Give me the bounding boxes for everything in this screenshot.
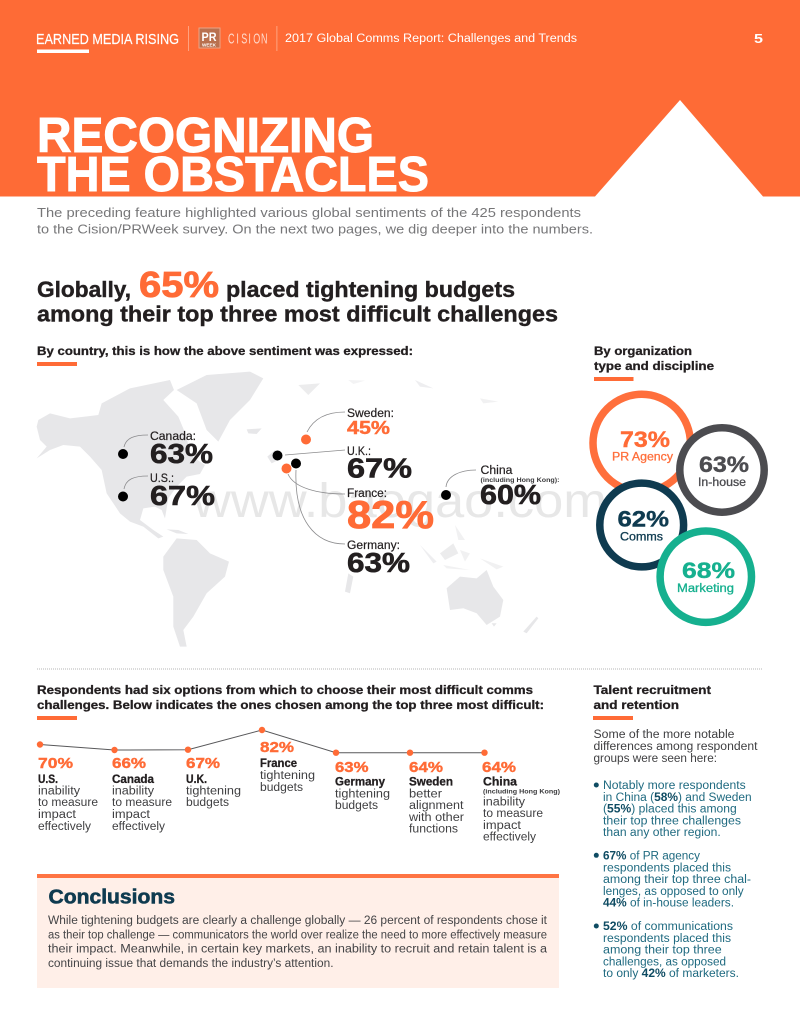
heading: talent recruitment: [593, 683, 711, 720]
bullet: PR agency: 44% of in-house leaders.: [603, 898, 734, 910]
map label: Germany: Germany:: [347, 540, 400, 552]
circle: In-house: [680, 428, 764, 512]
main headline: [37, 264, 558, 326]
map label: Canada: 63%: [150, 438, 213, 469]
conclusions body: continuing issue that demands the industry’s attention.: [48, 958, 334, 970]
circle: Comms: [600, 483, 684, 567]
column: Sweden: Sweden: [409, 774, 453, 788]
brand: Earned Media Rising: EARNED MEDIA RISING: [36, 31, 179, 48]
talent intro text: groups were seen here:: [594, 753, 717, 765]
column: Canada: to measure: [112, 797, 172, 809]
column: Germany: tightening: [335, 788, 390, 800]
circle: Comms: 62%: [618, 507, 669, 532]
map label: U.S.: U.S.:: [150, 473, 174, 485]
map label: China: 60%: [480, 479, 541, 510]
column: China: [482, 759, 560, 844]
circle: In-house: 63%: [699, 452, 749, 477]
heading: by organization: [594, 344, 714, 381]
map label: Sweden: Sweden:: [347, 408, 394, 420]
leader lines: [124, 412, 476, 544]
column: Canada: inability: [112, 786, 154, 798]
map label: China: China: [480, 465, 513, 477]
column: China: 64%: [482, 759, 516, 776]
column: Sweden: alignment: [409, 800, 464, 812]
map label: Canada: [118, 431, 213, 469]
heading: by organization: type and discipline: [594, 359, 714, 373]
brand: Earned Media Rising: [36, 31, 179, 53]
map label: France: [282, 464, 434, 537]
column: U.S.: 70%: [38, 755, 73, 772]
bullet: communications: [594, 921, 739, 980]
map label: Canada: Canada:: [150, 431, 196, 443]
bullet: communications: respondents placed this: [603, 933, 731, 945]
page number: 5: [754, 31, 763, 46]
column: France: France: [260, 756, 297, 770]
logo: PRWeek: PR: [202, 30, 217, 44]
logo: PRWeek: [199, 28, 220, 48]
main headline: among their top three most difficult challenges: [37, 302, 558, 326]
title: [37, 109, 429, 202]
heading: conclusions: Conclusions: [48, 887, 175, 909]
circle: Marketing: [660, 531, 752, 622]
column: U.S.: to measure: [38, 797, 98, 809]
heading: six options: Respondents had six options from which to choose their most difficult comms: [37, 683, 533, 697]
column: U.S.: impact: [38, 809, 77, 821]
bullet: communications: challenges, as opposed: [603, 956, 726, 968]
intro text: to the Cision/PRWeek survey. On the next two pages, we dig deeper into the numbers.: [37, 222, 593, 236]
column: U.K.: tightening: [186, 786, 241, 798]
column: China: (including Hong Kong): [483, 789, 560, 796]
column: China: inability: [483, 796, 525, 808]
map label: France: 82%: [347, 494, 434, 537]
circle: PR Agency: [593, 394, 690, 492]
map label: U.S.: [118, 473, 215, 511]
circle: Marketing: Marketing: [677, 583, 734, 595]
conclusions body: While tightening budgets are clearly a challenge globally — 26 percent of respondents chose it: [48, 915, 548, 927]
column: China: China: [483, 774, 517, 788]
column: U.K.: 67%: [186, 755, 220, 772]
intro text: The preceding feature highlighted various global sentiments of the 425 respondents: [37, 205, 582, 220]
bullet: PR agency: 67% of PR agency: [603, 850, 700, 862]
column: Sweden: 64%: [409, 759, 443, 776]
logo: PRWeek: WEEK: [202, 42, 217, 48]
column: Germany: 63%: [335, 759, 368, 776]
panel: conclusions: [37, 874, 559, 988]
bullet: China and Sweden: [594, 780, 752, 839]
bullet: China and Sweden: their top three challenges: [603, 816, 741, 828]
bullet: PR agency: lenges, as opposed to only: [603, 886, 744, 898]
heading: by organization: By organization: [594, 344, 692, 358]
talent intro text: Some of the more notable: [594, 729, 734, 741]
bullet: PR agency: respondents placed this: [603, 862, 731, 874]
map label: China: (including Hong Kong):: [480, 477, 560, 484]
bullet: communications: 52% of communications: [603, 921, 733, 933]
title: RECOGNIZING: [37, 109, 374, 163]
column: Canada: 66%: [112, 755, 146, 772]
map label: France: France:: [347, 488, 387, 500]
world map: [37, 372, 538, 647]
map label: Sweden: [301, 408, 394, 444]
column: Canada: effectively: [112, 821, 165, 833]
circle: In-house: In-house: [698, 477, 746, 489]
column: France: [260, 739, 315, 794]
heading: by country: By country, this is how the above sentiment was expressed:: [37, 344, 413, 358]
header banner: [0, 0, 800, 202]
map label: U.K.: [272, 446, 412, 484]
column: U.S.: effectively: [38, 821, 91, 833]
map label: U.S.: 67%: [150, 480, 215, 511]
column: Sweden: with other: [408, 812, 464, 824]
heading: six options: challenges. Below indicates the ones chosen among the top three most difficult:: [37, 698, 544, 712]
heading: talent recruitment: Talent recruitment: [594, 683, 711, 697]
conclusions body: their impact. Meanwhile, in certain key markets, an inability to recruit and retain talent is a: [48, 944, 548, 956]
map label: U.K.: U.K.:: [347, 446, 371, 458]
conclusions body: as their top challenge — communicators the world over realize the need to more effectively measure: [48, 929, 547, 941]
map label: Germany: 63%: [347, 547, 410, 578]
column: U.S.: U.S.: [38, 772, 58, 786]
main headline: Globally,: [37, 277, 131, 302]
column: France: budgets: [260, 782, 303, 794]
bullet: PR agency: among their top three chal-: [603, 874, 751, 886]
column: France: tightening: [260, 770, 315, 782]
column: France: 82%: [260, 739, 294, 756]
report name: 2017 Global Comms Report: Challenges and Trends: [285, 33, 577, 45]
watermark: www.baogao.com: [192, 475, 607, 528]
bullet: China and Sweden: Notably more respondents: [603, 780, 746, 792]
column: Canada: impact: [112, 809, 151, 821]
circle: Comms: Comms: [620, 532, 663, 544]
column: China: to measure: [483, 808, 543, 820]
bullet: communications: to only 42% of marketers.: [603, 968, 739, 980]
heading: six options: [37, 683, 544, 720]
column: U.K.: budgets: [186, 797, 229, 809]
map label: U.K.: 67%: [347, 452, 412, 484]
column: China: effectively: [483, 832, 536, 844]
title: THE OBSTACLES: [37, 148, 429, 202]
bullet: China and Sweden: in China (58%) and Sweden: [603, 792, 752, 804]
map label: Germany: [291, 458, 410, 578]
talent intro text: [594, 729, 758, 765]
column: Canada: [112, 755, 172, 833]
bullet: China and Sweden: (55%) placed this among: [603, 804, 737, 816]
talent intro text: differences among respondent: [594, 741, 758, 753]
column: Sweden: [408, 759, 464, 836]
logo: Cision: CISION: [228, 30, 268, 47]
column: Canada: Canada: [112, 772, 154, 786]
map label: Sweden: 45%: [347, 418, 390, 438]
column: China: impact: [483, 820, 522, 832]
bullet: China and Sweden: than any other region.: [603, 827, 721, 839]
circle: Marketing: 68%: [682, 558, 735, 583]
column: U.S.: inability: [38, 786, 80, 798]
line chart: [37, 727, 488, 756]
bullet: communications: among their top three: [603, 945, 722, 957]
map label: China: [441, 465, 560, 510]
column: U.K.: [186, 755, 241, 809]
circle: PR Agency: 73%: [620, 427, 670, 452]
column: Sweden: better: [409, 788, 442, 800]
heading: talent recruitment: and retention: [594, 698, 679, 712]
column: Germany: [335, 759, 390, 812]
heading: by country: [37, 344, 413, 366]
column: U.K.: U.K.: [186, 772, 207, 786]
main headline: 65%: [139, 264, 219, 305]
column: Germany: budgets: [335, 800, 378, 812]
bullet: PR agency: [594, 850, 751, 910]
column: U.S.: [38, 755, 98, 833]
main headline: placed tightening budgets: [226, 277, 515, 302]
intro text: [37, 205, 593, 236]
conclusions body: [48, 915, 548, 970]
white triangle: [595, 100, 763, 196]
circle: PR Agency: PR Agency: [612, 452, 673, 464]
column: Germany: Germany: [335, 774, 385, 788]
column: Sweden: functions: [409, 824, 458, 836]
